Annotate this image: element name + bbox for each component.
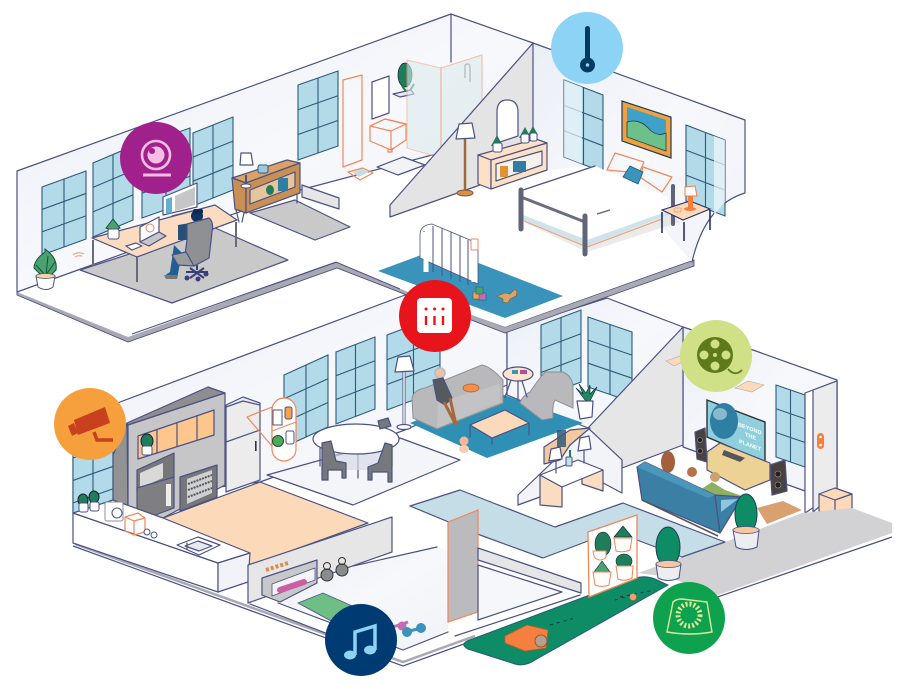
kitchen shelf plant: [141, 434, 153, 455]
counter: [73, 491, 250, 592]
badge: thermometer: [551, 12, 623, 84]
exercise room walls and floor: [250, 547, 448, 652]
television: THE: [745, 432, 756, 442]
sink: [177, 537, 220, 555]
desk plant: [106, 219, 120, 239]
badge: webcam: [120, 122, 192, 194]
bedroom window left: [564, 80, 603, 172]
living room rug: [410, 390, 583, 458]
framed painting: [622, 101, 671, 158]
office window 3: [142, 128, 190, 218]
kitchen cabinets: [113, 387, 225, 518]
media room door panel: [805, 381, 837, 513]
sideboard rug: [250, 200, 350, 240]
oven: [180, 465, 217, 511]
baby: [459, 436, 469, 453]
kitchen floor: [163, 482, 368, 565]
small partition: [302, 185, 339, 209]
green exercise mat: [298, 593, 357, 622]
patio: [410, 490, 725, 558]
pillows: [607, 153, 672, 192]
office window 2: [93, 146, 133, 237]
dining area rug: [267, 438, 460, 505]
sideboard: [232, 160, 300, 222]
lower floor: [73, 295, 892, 666]
arched mirror: [497, 100, 518, 143]
kitchen left window: [73, 444, 113, 526]
counter plants: [78, 491, 99, 512]
yoga shelf: [262, 560, 317, 602]
armchair: [520, 372, 573, 420]
badge: music: [325, 604, 397, 676]
staircase partition: [518, 327, 683, 505]
low wall by path: [455, 548, 581, 636]
shower glass: [407, 55, 482, 158]
laptop: [140, 217, 166, 246]
back wall of media room: [683, 327, 837, 492]
microwave: [137, 453, 174, 492]
person at desk: [164, 209, 203, 279]
bed: [521, 153, 680, 254]
hanging plant shelf: [393, 63, 414, 97]
table lamp: [240, 153, 253, 188]
kettlebells: [321, 558, 348, 581]
upper floor: [17, 14, 745, 342]
lawn: [464, 577, 668, 665]
office rug: [80, 227, 288, 303]
driveway: [638, 508, 892, 595]
dining window 2: [336, 337, 375, 424]
bathroom mirror: [372, 76, 389, 119]
back wall left: [17, 14, 533, 292]
bedroom window right: [686, 125, 725, 216]
potted plants: [593, 526, 633, 586]
stand mixer: [105, 502, 123, 521]
living window 1: [387, 315, 440, 410]
topiary left: [656, 527, 681, 580]
blue sofa: [637, 462, 742, 536]
partition to exercise room: [248, 517, 392, 603]
bed frame: [521, 186, 673, 254]
wifi icon: [73, 253, 84, 257]
office chair: [172, 218, 213, 282]
mugs: [144, 529, 157, 538]
dining chairs: [322, 418, 392, 482]
bath mat: [377, 157, 425, 175]
teddy bear: [497, 289, 517, 303]
television: BEYOND: [738, 422, 761, 437]
grey column: [448, 510, 478, 622]
coffee table: [470, 410, 529, 444]
crib: [420, 224, 478, 285]
bathroom door: [343, 75, 362, 167]
floor lamp: [395, 356, 414, 430]
fridge callout: [247, 398, 296, 461]
notepad: [126, 243, 142, 250]
parcel box: [819, 488, 852, 518]
floor plant: [34, 249, 56, 290]
mower path dashes: [550, 590, 655, 625]
badge: lawn map: [653, 582, 725, 654]
monitor: [163, 183, 197, 221]
upper floor slab: [17, 100, 700, 342]
living window 2: [541, 310, 581, 397]
desk: [92, 205, 237, 282]
doormat: [757, 501, 802, 524]
orange box: [125, 513, 145, 535]
living room plant: [576, 384, 597, 419]
orange tray: [348, 168, 373, 180]
bedroom floor lamp: [456, 123, 475, 196]
peach upper cupboards: [138, 410, 214, 459]
dining table: [313, 418, 399, 482]
sleeping cat: [463, 384, 479, 392]
bookshelf: [478, 126, 547, 189]
side table: [503, 367, 533, 400]
television: PLANET: [739, 439, 761, 453]
media room window: [776, 385, 805, 467]
family: [661, 451, 745, 505]
hallway window: [298, 71, 338, 160]
woman on sofa: [433, 368, 456, 425]
back wall of kitchen and dining room: [73, 295, 507, 513]
back wall right: [533, 43, 745, 262]
wall shelves: [666, 356, 764, 392]
television: [707, 400, 765, 462]
grey sofa: [412, 365, 503, 429]
speaker left: [695, 428, 707, 462]
dumbbells: [393, 622, 426, 637]
badge: security camera: [54, 388, 126, 460]
living window 3: [588, 317, 632, 402]
plant poster: [588, 515, 637, 597]
dining window 1: [284, 355, 328, 447]
robot mower: [505, 625, 548, 651]
fridge: [226, 397, 260, 492]
tv stand: [707, 443, 770, 490]
lower cupboard: [137, 477, 174, 517]
badge: calendar: [399, 280, 471, 352]
office window 1: [42, 171, 86, 255]
crib rug: [378, 248, 563, 318]
topiary right: [733, 494, 759, 550]
bedside table: [662, 186, 710, 241]
lower floor slab: [73, 330, 892, 666]
bathroom sink: [370, 119, 406, 152]
speaker right: [770, 460, 787, 495]
office window 4: [193, 117, 233, 206]
toy blocks: [473, 287, 486, 300]
badge: film reel: [680, 320, 752, 392]
shelf plants: [491, 126, 538, 152]
back wall of living room: [507, 298, 683, 428]
stair partition: [390, 43, 533, 217]
console with photo and lamps: [540, 428, 603, 507]
gift box on sideboard: [258, 165, 268, 173]
small robot: [630, 594, 636, 600]
